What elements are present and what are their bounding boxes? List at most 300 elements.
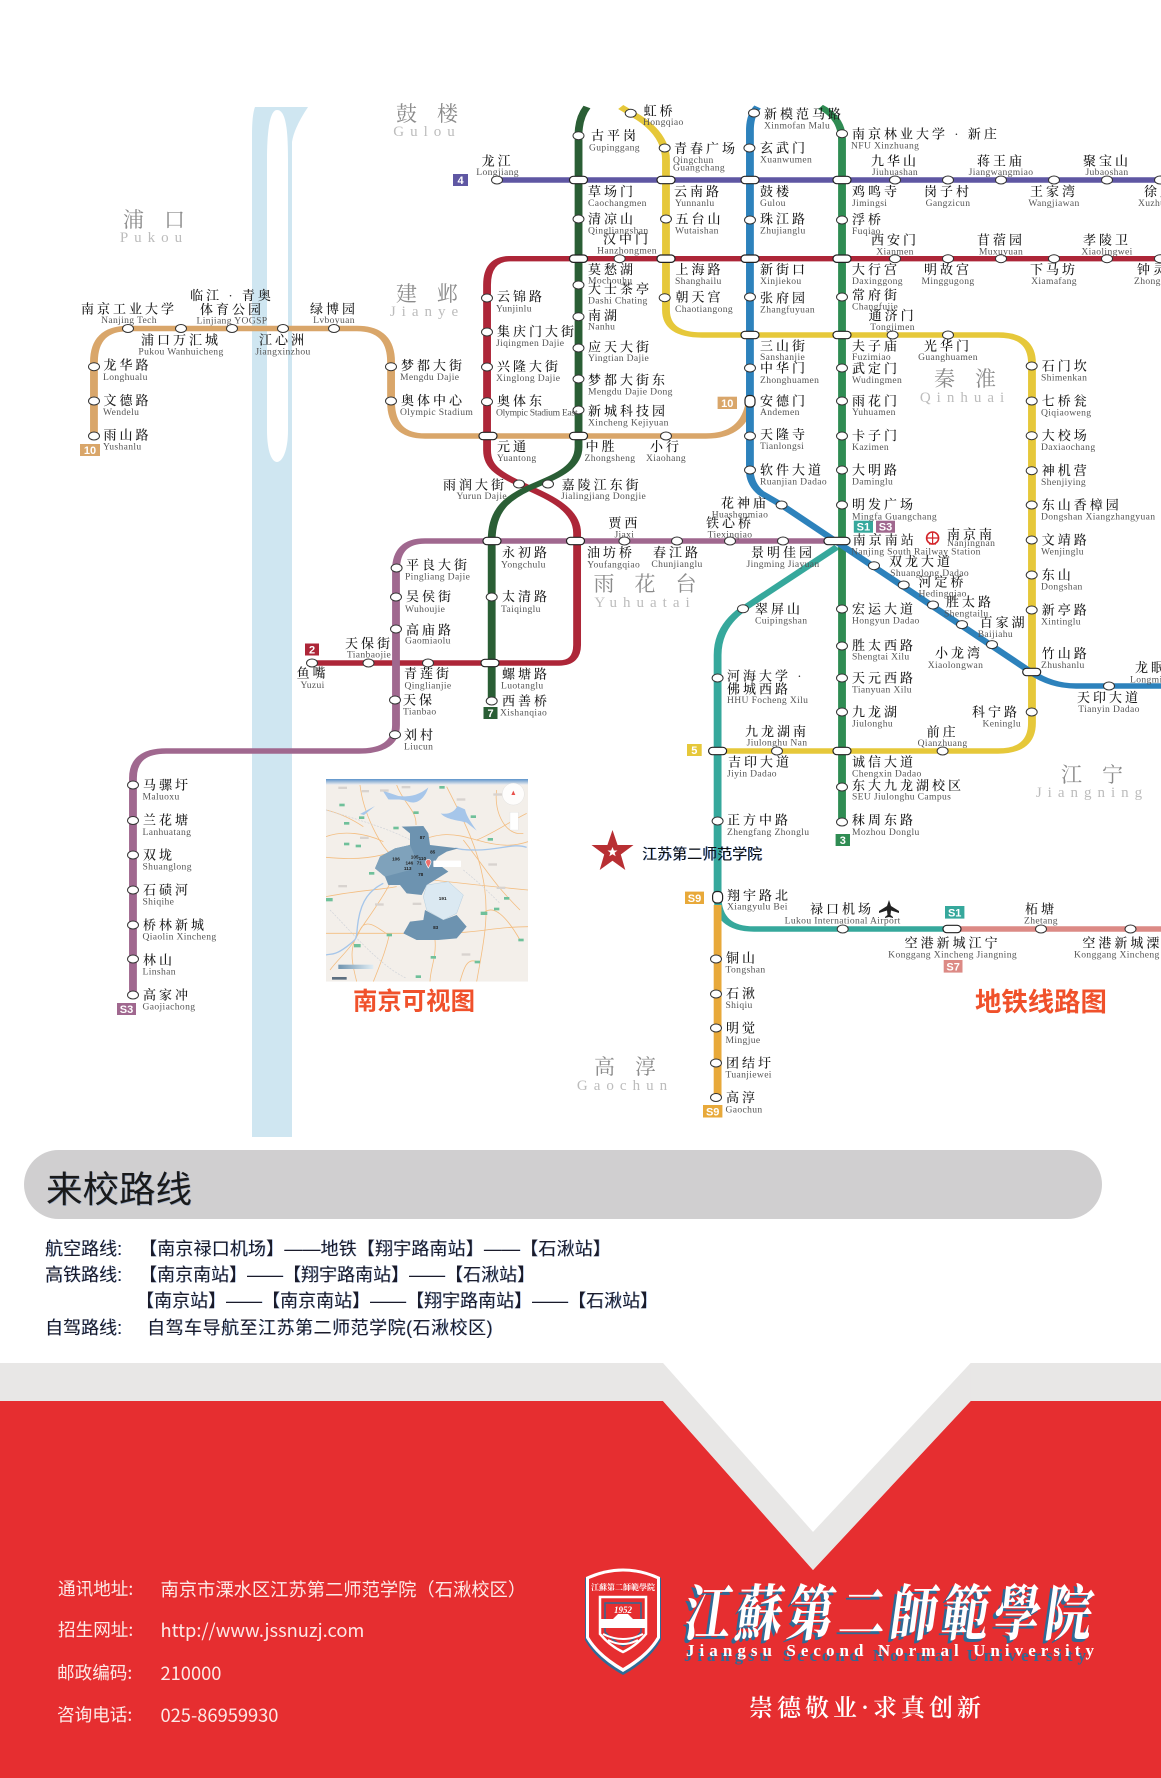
station labels: line 10: 体育公园 bbox=[200, 302, 264, 317]
station labels: line 7: 草场门 bbox=[588, 184, 636, 199]
station labels: line 2: Minggugong bbox=[921, 276, 975, 287]
station labels: line S3: Tianbao bbox=[403, 706, 437, 717]
station labels: line 10: 梦都大街 bbox=[401, 358, 465, 373]
station labels: line 1: 双龙大道 bbox=[889, 554, 953, 569]
station labels: line 5: Wenjinglu bbox=[1041, 546, 1084, 557]
nanjing visual map: 113 bbox=[404, 866, 412, 871]
station labels: line 1: 软件大道 bbox=[760, 462, 824, 478]
line S1 bbox=[718, 547, 952, 929]
icon: railway station: Nanjingnan bbox=[947, 538, 995, 549]
icon: university crest: 1952 bbox=[614, 1605, 632, 1615]
station labels: line 10: 文德路 bbox=[104, 393, 152, 408]
station labels: line 10: Yushanlu bbox=[103, 441, 142, 452]
station labels: line 3: Nanjing South Railway Station bbox=[851, 546, 981, 557]
station labels: line 2: 雨润大街 bbox=[443, 478, 507, 492]
station labels: line 3: Daminglu bbox=[852, 476, 893, 487]
station labels: lines S1 S7 S9: Konggang Xincheng Jiangning bbox=[888, 949, 1017, 960]
station labels: line 2: Jialingjiang Dongjie bbox=[561, 491, 646, 502]
icon: airplane bbox=[879, 900, 899, 918]
station labels: line S3: 贾西 bbox=[608, 516, 640, 530]
station labels: line 2: Xiamafang bbox=[1031, 276, 1077, 287]
station labels: line 1: 安德门 bbox=[760, 394, 808, 408]
district names: 秦淮 bbox=[934, 363, 1016, 393]
station labels: line 3: Jiulonghu bbox=[852, 718, 893, 729]
station labels: line 5: Shenjiying bbox=[1041, 477, 1086, 488]
station labels: line 1: 百家湖 bbox=[980, 615, 1028, 630]
station labels: line 2: Yurun Dajie bbox=[457, 491, 507, 502]
station labels: line 7: 螺塘路 bbox=[502, 666, 550, 682]
line S9 bbox=[715, 905, 720, 1098]
district names: Gaochun bbox=[577, 1078, 673, 1094]
station labels: line 3: Mingfa Guangchang bbox=[852, 511, 937, 522]
station labels: line 10: 雨山路 bbox=[104, 428, 152, 442]
line badges: 4 bbox=[457, 175, 464, 187]
district names: 浦口 bbox=[123, 204, 205, 234]
station labels: line 1: Zhonghuamen bbox=[760, 375, 819, 386]
station labels: line 2: Olympic Stadium East bbox=[496, 407, 578, 418]
station labels: line 10: Wendelu bbox=[103, 407, 139, 418]
station labels: line 2: 孝陵卫 bbox=[1083, 232, 1131, 248]
station labels: line 3: Hongyun Dadao bbox=[852, 616, 920, 627]
station labels: line S3: Shuanglong bbox=[142, 861, 192, 872]
district names: 江宁 bbox=[1061, 759, 1143, 789]
station labels: line S3: 双垅 bbox=[143, 848, 175, 862]
station labels: line 5: Guangchang bbox=[673, 162, 725, 173]
station labels: line 7: Dashi Chating bbox=[588, 295, 648, 306]
station labels: line 10: 元通 bbox=[497, 439, 529, 454]
station labels: line 10: Linjiang YOGSP bbox=[197, 315, 267, 326]
station labels: line S3: 铁心桥 bbox=[706, 516, 754, 530]
station labels: line 2: 云锦路 bbox=[497, 289, 545, 304]
station labels: line 1: Hedingqiao bbox=[918, 588, 967, 599]
station labels: line 1: 小龙湾 bbox=[935, 646, 983, 660]
station labels: line 3: 浮桥 bbox=[852, 212, 884, 227]
station labels: line 3: 夫子庙 bbox=[852, 338, 900, 354]
station labels: line S3: 天保 bbox=[403, 692, 435, 708]
station labels: line 5: Yunnanlu bbox=[675, 198, 715, 209]
station labels: line 1: 河定桥 bbox=[918, 574, 967, 590]
station labels: line 10: 小行 bbox=[650, 439, 682, 454]
station labels: lines S1 S7 S9: 高淳 bbox=[726, 1090, 758, 1105]
station labels: line 3: Yuhuamen bbox=[852, 407, 896, 418]
station labels: line S3: 桥林新城 bbox=[143, 918, 207, 932]
line 10 bbox=[94, 328, 750, 436]
station labels: line 4: 龙江 bbox=[482, 154, 514, 168]
station labels: lines S1 S7 S9: 翠屏山 bbox=[755, 602, 803, 616]
line 3 bbox=[821, 107, 842, 822]
station labels: line S3 bbox=[142, 516, 820, 1012]
line badges: S3 bbox=[120, 1004, 133, 1016]
station labels: line 4: Jubaoshan bbox=[1085, 167, 1129, 178]
station labels: line 5: 九龙湖南 bbox=[745, 724, 809, 739]
station labels: line 1: Shuanglong Dadao bbox=[890, 568, 969, 579]
district names: 鼓楼 bbox=[396, 98, 478, 128]
station labels: line 1: 玄武门 bbox=[760, 140, 808, 156]
line 2 bbox=[312, 259, 1161, 663]
nanjing visual map: 146 bbox=[405, 860, 414, 865]
station labels: lines S1 S7 S9: 明觉 bbox=[726, 1020, 758, 1036]
station labels: line 1: 新街口 bbox=[760, 262, 808, 277]
river bbox=[252, 107, 308, 1137]
station labels: line 7: 应天大街 bbox=[588, 340, 652, 354]
station labels: line S3: 油坊桥 bbox=[587, 545, 635, 560]
university english name: Jiangsu Second Normal University bbox=[686, 1641, 1094, 1660]
station labels: line 10: 江心洲 bbox=[259, 332, 307, 348]
station labels: line 10: 临江 · 青奥 bbox=[190, 288, 274, 303]
station labels: line S3: Pingliang Dajie bbox=[405, 571, 470, 582]
station labels: line 5: Zhushanlu bbox=[1041, 660, 1085, 671]
icon: university crest: 江蘇第二師範學院 bbox=[591, 1582, 655, 1593]
station labels: line 7: 大士茶亭 bbox=[588, 282, 652, 296]
station labels: line 7: Caochangmen bbox=[588, 198, 647, 209]
station labels: line 5: 科宁路 bbox=[972, 704, 1020, 720]
interchange stations bbox=[479, 176, 1041, 933]
station labels: line 3: 明发广场 bbox=[852, 497, 916, 512]
station labels: line 2: 汉中门 bbox=[603, 232, 651, 246]
station labels: line 2: Xianmen bbox=[876, 246, 914, 257]
station labels: line 2: Jiqingmen Dajie bbox=[496, 338, 564, 349]
station labels: line S3: Gaojiachong bbox=[142, 1001, 195, 1012]
station labels: line 2: Tianbaojie bbox=[347, 649, 391, 660]
station labels: line 2: 西安门 bbox=[871, 232, 919, 248]
route text: 航空路线: bbox=[45, 1238, 122, 1258]
station labels: lines S1 S7 S9: 石湫 bbox=[726, 986, 758, 1001]
station labels: line 10: Zhongsheng bbox=[584, 453, 635, 464]
station labels: line 4: Jiuhuashan bbox=[872, 167, 918, 178]
station labels: line 5: 光华门 bbox=[924, 338, 972, 354]
nanjing visual map: 83 bbox=[433, 925, 439, 930]
station labels: line 3: 东大九龙湖校区 bbox=[852, 778, 964, 793]
station labels: line 10: Pukou Wanhuicheng bbox=[138, 346, 224, 357]
station labels: line 3: Mozhou Donglu bbox=[852, 827, 920, 838]
line badges: S3 bbox=[879, 522, 892, 534]
station labels: line 3: 南京南站 bbox=[853, 532, 917, 548]
station labels: line S3: 林山 bbox=[143, 952, 175, 968]
station labels: line S3: Jingming Jiayuan bbox=[746, 559, 820, 570]
station labels: line 7: 西善桥 bbox=[502, 694, 550, 708]
station labels: line S3: Shiqihe bbox=[142, 896, 174, 907]
station labels: line 1: Xinmofan Malu bbox=[764, 120, 830, 131]
station labels: line 3: SEU Jiulonghu Campus bbox=[852, 792, 951, 803]
station labels: line 3: NFU Xinzhuang bbox=[851, 140, 919, 151]
station labels: line 1: Andemen bbox=[760, 407, 800, 418]
station labels: line 2: Yuzui bbox=[301, 680, 325, 691]
station labels: line 5: 朝天宫 bbox=[676, 290, 724, 304]
station labels: line 10: Jiangxinzhou bbox=[255, 346, 311, 357]
university name: 江蘇第二師範學院 bbox=[679, 1565, 1100, 1653]
contact info: 通讯地址: bbox=[58, 1576, 133, 1600]
station labels: line 7: Xishanqiao bbox=[500, 707, 547, 718]
station labels: line 1: 中华门 bbox=[760, 360, 808, 376]
station labels: line 1: 张府园 bbox=[760, 290, 808, 306]
district names: Yuhuatai bbox=[594, 595, 696, 611]
station labels: line S3: Qiaolin Xincheng bbox=[142, 931, 217, 942]
district names: 雨花台 bbox=[594, 568, 716, 598]
station labels: line 10: Lvboyuan bbox=[313, 315, 355, 326]
route text: 自驾车导航至江苏第二师范学院(石湫校区) bbox=[147, 1318, 493, 1338]
icon: star marker bbox=[592, 830, 634, 870]
station labels: line S3: 春江路 bbox=[653, 545, 701, 560]
station labels: line 10: 中胜 bbox=[586, 439, 618, 454]
station labels: line 5: Guanghuamen bbox=[918, 352, 978, 363]
station labels: line 5: 东山 bbox=[1042, 568, 1074, 582]
station labels: line 1: 三山街 bbox=[760, 338, 808, 354]
station labels: line 3: 卡子门 bbox=[852, 428, 900, 443]
station labels: line 7: Nanhu bbox=[588, 321, 615, 332]
station labels: line 4: Wangjiawan bbox=[1028, 198, 1080, 209]
station labels: line 5: 神机营 bbox=[1042, 463, 1090, 478]
station labels: line 2: 苜蓿园 bbox=[977, 232, 1025, 248]
icon: university crest bbox=[585, 1568, 661, 1675]
station labels: line 7: Taiqinglu bbox=[501, 604, 541, 615]
line badges: S1 bbox=[948, 907, 961, 919]
station labels: line 2 bbox=[297, 232, 1161, 691]
station labels: line 7: 清凉山 bbox=[588, 212, 636, 226]
nanjing visual map: 110 bbox=[419, 856, 426, 861]
station labels: line S3: Gaomiaolu bbox=[405, 635, 451, 646]
contact info: 邮政编码: bbox=[57, 1660, 132, 1684]
station labels: line 10: Xiaohang bbox=[646, 453, 686, 464]
station labels: lines S1 S7 S9: Jiyin Dadao bbox=[727, 768, 777, 779]
station labels: lines S1 S7 S9: 翔宇路北 bbox=[727, 888, 791, 903]
station labels: line 3: 南京林业大学 · 新庄 bbox=[852, 126, 1000, 142]
station labels: line 5: Chaotiangong bbox=[675, 304, 733, 315]
station labels: line S3: 吴侯街 bbox=[406, 589, 454, 604]
station labels: line 10: Olympic Stadium bbox=[400, 407, 473, 418]
line badges bbox=[80, 174, 964, 1118]
university name: 江蘇第二師範學院 bbox=[676, 1568, 1097, 1656]
contact info: 咨询电话: bbox=[57, 1702, 132, 1726]
metro map bbox=[80, 98, 1161, 1137]
line badges: 7 bbox=[487, 708, 494, 720]
district names: 建邺 bbox=[396, 278, 478, 308]
contact info bbox=[57, 1576, 526, 1728]
stations bbox=[88, 109, 1161, 1102]
route text: 【南京站】——【南京南站】——【翔宇路南站】——【石湫站】 bbox=[136, 1291, 658, 1311]
district names: Pukou bbox=[120, 230, 188, 246]
station labels: line 10: Longhualu bbox=[103, 372, 148, 383]
station labels: lines S1 S7 S9: 正方中路 bbox=[727, 812, 791, 828]
station labels: line 1: 天隆寺 bbox=[760, 427, 808, 442]
line badges: S1 bbox=[857, 522, 870, 534]
station labels: line 2: Qinglianjie bbox=[404, 680, 452, 691]
station labels: line 3: Fuzimiao bbox=[852, 352, 891, 363]
station labels: line 10: 浦口万汇城 bbox=[141, 332, 221, 348]
line badges: S7 bbox=[946, 961, 960, 973]
station labels: line S3: Jiaxi bbox=[614, 529, 634, 540]
station labels: line 3: 天元西路 bbox=[852, 670, 916, 686]
station labels: line 10 bbox=[81, 288, 686, 464]
station labels: line 1: 花神庙 bbox=[721, 496, 769, 510]
station labels: lines S1 S7 S9: 禄口机场 bbox=[810, 901, 874, 916]
station labels: lines S1 S7 S9: Shiqiu bbox=[726, 1000, 753, 1011]
station labels: line 7: 南湖 bbox=[588, 308, 620, 323]
station labels: lines S1 S7 S9 bbox=[726, 602, 1161, 1115]
station labels: line S3: Lanhuatang bbox=[142, 827, 191, 838]
contact info: http://www.jssnuzj.com bbox=[160, 1616, 364, 1642]
station labels: line S3: 兰花塘 bbox=[143, 812, 191, 828]
station labels: line 1: Tianyin Dadao bbox=[1078, 704, 1140, 715]
station labels: line 10: Yuantong bbox=[497, 453, 537, 464]
station labels: line 4: Jiangwangmiao bbox=[969, 167, 1033, 178]
visual map caption: 南京可视图 bbox=[353, 982, 475, 1018]
line badges: 3 bbox=[840, 835, 846, 847]
station labels: line 1: Shengtailu bbox=[944, 608, 989, 619]
station labels: line 10: 绿博园 bbox=[310, 302, 358, 316]
district names: Qinhuai bbox=[920, 390, 1010, 406]
station labels: lines S1 S7 S9: 佛城西路 bbox=[727, 681, 791, 696]
station labels: line S3: 平良大街 bbox=[406, 558, 470, 572]
station labels: lines S1 S7 S9: Lukou International Airport bbox=[785, 915, 901, 926]
station labels: line 2: 兴隆大街 bbox=[497, 359, 561, 374]
station labels: line 5: Qingchun bbox=[673, 155, 714, 166]
station labels: line 1: 新模范马路 bbox=[764, 106, 844, 122]
station labels: line 10: 南京工业大学 bbox=[81, 302, 177, 316]
section title: 来校路线 bbox=[46, 1160, 192, 1213]
station labels: line 5: 大校场 bbox=[1042, 428, 1090, 443]
station labels: line 7: Mengdu Dajie Dong bbox=[588, 386, 673, 397]
station labels: line S3: 马骡圩 bbox=[143, 778, 191, 792]
station labels: line 3: 常府街 bbox=[852, 288, 900, 302]
station labels: line 2: 鱼嘴 bbox=[297, 666, 329, 680]
station labels: line 3: Tianyuan Xilu bbox=[852, 684, 912, 695]
station labels: line 7: Yingtian Dajie bbox=[588, 353, 649, 364]
station labels: line 7: Qingliangshan bbox=[588, 225, 649, 236]
station labels: line 2: 青莲街 bbox=[404, 666, 452, 681]
station labels: line 1: 胜太路 bbox=[946, 594, 994, 610]
station labels: line S3: 高庙路 bbox=[406, 622, 454, 638]
line badges: 5 bbox=[691, 745, 697, 757]
station labels: line 5: 上海路 bbox=[676, 262, 724, 277]
station labels: line 5: Qianzhuang bbox=[918, 738, 968, 749]
station labels: line 1: Sanshanjie bbox=[760, 352, 805, 363]
station labels: line 3: Wudingmen bbox=[852, 375, 902, 386]
nanjing visual map: 105 bbox=[411, 854, 419, 859]
station labels: line 3: Chengxin Dadao bbox=[852, 768, 922, 779]
district names: 高淳 bbox=[594, 1051, 676, 1081]
icon: railway station: 南京南 bbox=[947, 527, 995, 542]
station labels: line 7: Mochouhu bbox=[588, 276, 632, 287]
nanjing visual map bbox=[326, 779, 528, 982]
station labels: line 5: Jiulonghu Nan bbox=[747, 737, 807, 748]
station labels: line S3: Maluoxu bbox=[142, 792, 180, 803]
station labels: lines S1 S7 S9: Xiangyulu Bei bbox=[727, 901, 788, 912]
nanjing visual map: 106 bbox=[392, 857, 400, 862]
station labels: line 2: Muxuyuan bbox=[979, 246, 1023, 257]
station labels: line 10: 龙华路 bbox=[104, 358, 152, 372]
station labels: line 3: 诚信大道 bbox=[852, 754, 916, 770]
station labels: line 1: Xinjiekou bbox=[760, 276, 802, 287]
station labels: line 4: 聚宝山 bbox=[1083, 154, 1131, 168]
route text: 自驾路线: bbox=[45, 1318, 122, 1338]
station labels: lines S1 S7 S9: 河海大学 · bbox=[727, 668, 805, 684]
station labels: line 1: Tianlongsi bbox=[760, 441, 804, 452]
station labels: line 5: 五台山 bbox=[676, 212, 724, 226]
station labels: line 3 bbox=[851, 126, 1000, 838]
station labels: line 4: Gangzicun bbox=[926, 198, 970, 209]
station labels: line 5: 通济门 bbox=[869, 308, 917, 323]
nanjing visual map: 85 bbox=[430, 849, 436, 854]
station labels: line 7 bbox=[500, 128, 673, 718]
station labels: line 2: 嘉陵江东街 bbox=[562, 478, 642, 492]
station labels: line S3: Youfangqiao bbox=[587, 559, 640, 570]
station labels: line 5: 青春广场 bbox=[674, 141, 738, 156]
station labels: line 2: Yunjinlu bbox=[496, 303, 532, 314]
station labels: line 1: Zhangfuyuan bbox=[760, 304, 815, 315]
station labels: line 5: Xintinglu bbox=[1041, 616, 1081, 627]
station labels: line 1: Ruanjian Dadao bbox=[760, 476, 827, 487]
station labels: line 2: Xiaolingwei bbox=[1081, 246, 1133, 257]
contact info: 南京市溧水区江苏第二师范学院（石湫校区） bbox=[160, 1576, 526, 1602]
station labels: line 5: 竹山路 bbox=[1042, 646, 1090, 661]
route text: 【南京禄口机场】——地铁【翔宇路南站】——【石湫站】 bbox=[139, 1238, 611, 1258]
station labels: line 3: 宏运大道 bbox=[852, 602, 916, 616]
station labels: line 10: Mengdu Dajie bbox=[400, 372, 459, 383]
line badges: S9 bbox=[706, 1106, 719, 1118]
station labels: line 3: 九龙湖 bbox=[852, 704, 900, 720]
station labels: lines S1 S7 S9: 铜山 bbox=[726, 950, 758, 966]
station labels: line 5: Wutaishan bbox=[675, 225, 719, 236]
station labels: lines S1 S7 S9: 空港新城江宁 bbox=[905, 936, 1001, 950]
station labels: line 3: Shengtai Xilu bbox=[852, 651, 910, 662]
station labels: line 1: Xuanwumen bbox=[760, 154, 812, 165]
university english name: Jiangsu Second Normal University bbox=[684, 1646, 1086, 1665]
station labels: line 4: 蒋王庙 bbox=[977, 154, 1025, 168]
station labels: line 3: 雨花门 bbox=[852, 394, 900, 408]
station labels: lines S1 S7 S9: Tuanjiewei bbox=[726, 1070, 772, 1081]
station labels: lines S1 S7 S9: 团结圩 bbox=[726, 1056, 774, 1070]
station labels: line 4: 岗子村 bbox=[924, 184, 972, 199]
station labels: line 2: Xinglong Dajie bbox=[496, 373, 560, 384]
station labels: line 5: Dongshan bbox=[1041, 581, 1083, 592]
nanjing visual map: 71 bbox=[417, 860, 422, 865]
station labels: line 5: 虹桥 bbox=[644, 104, 676, 118]
station labels: line 1: 天印大道 bbox=[1077, 690, 1141, 705]
station labels: line 3: 武定门 bbox=[852, 361, 900, 376]
station labels: lines S1 S7 S9: Cuipingshan bbox=[755, 616, 807, 627]
station labels: line 2: Hanzhongmen bbox=[597, 245, 657, 256]
contact info: 招生网址: bbox=[58, 1616, 133, 1642]
station labels: line 5: Daxiaochang bbox=[1041, 442, 1095, 453]
nanjing visual map: 191 bbox=[439, 896, 447, 901]
station labels: line 5: 新亭路 bbox=[1042, 602, 1090, 618]
station labels: line 3: 鸡鸣寺 bbox=[852, 184, 900, 199]
station labels: line S3: 景明佳园 bbox=[751, 545, 815, 560]
station labels: line 3: 大明路 bbox=[852, 462, 900, 478]
station labels: line 7: 莫愁湖 bbox=[588, 262, 636, 277]
section header bar bbox=[24, 1150, 1102, 1219]
station labels: lines S1 S7 S9: Zhetang bbox=[1024, 915, 1058, 926]
station labels: line 7: 古平岗 bbox=[591, 128, 639, 143]
station labels: line 4: Longjiang bbox=[476, 167, 519, 178]
district names: Jiangning bbox=[1036, 785, 1148, 801]
station labels: line S3: Liucun bbox=[404, 741, 433, 752]
subway map caption: 地铁线路图 bbox=[975, 980, 1107, 1019]
station labels: line 5: 云南路 bbox=[674, 184, 722, 199]
district names bbox=[120, 98, 1148, 1094]
station labels: line 2: 天保街 bbox=[345, 636, 393, 651]
line badges: 2 bbox=[309, 644, 315, 656]
station labels: line S3: Linshan bbox=[142, 966, 176, 977]
station labels: line 4: 王家湾 bbox=[1030, 184, 1078, 199]
station labels: line 4 bbox=[476, 154, 1161, 209]
station labels: line 7: Luotanglu bbox=[501, 680, 544, 691]
station labels: line 1: Baijiahu bbox=[978, 629, 1013, 640]
station labels: line 10: 奥体中心 bbox=[401, 393, 465, 408]
motto: 崇德敬业·求真创新 bbox=[749, 1688, 981, 1723]
station labels: line 1 bbox=[712, 106, 1161, 715]
station labels: line S3: 刘村 bbox=[404, 728, 436, 742]
